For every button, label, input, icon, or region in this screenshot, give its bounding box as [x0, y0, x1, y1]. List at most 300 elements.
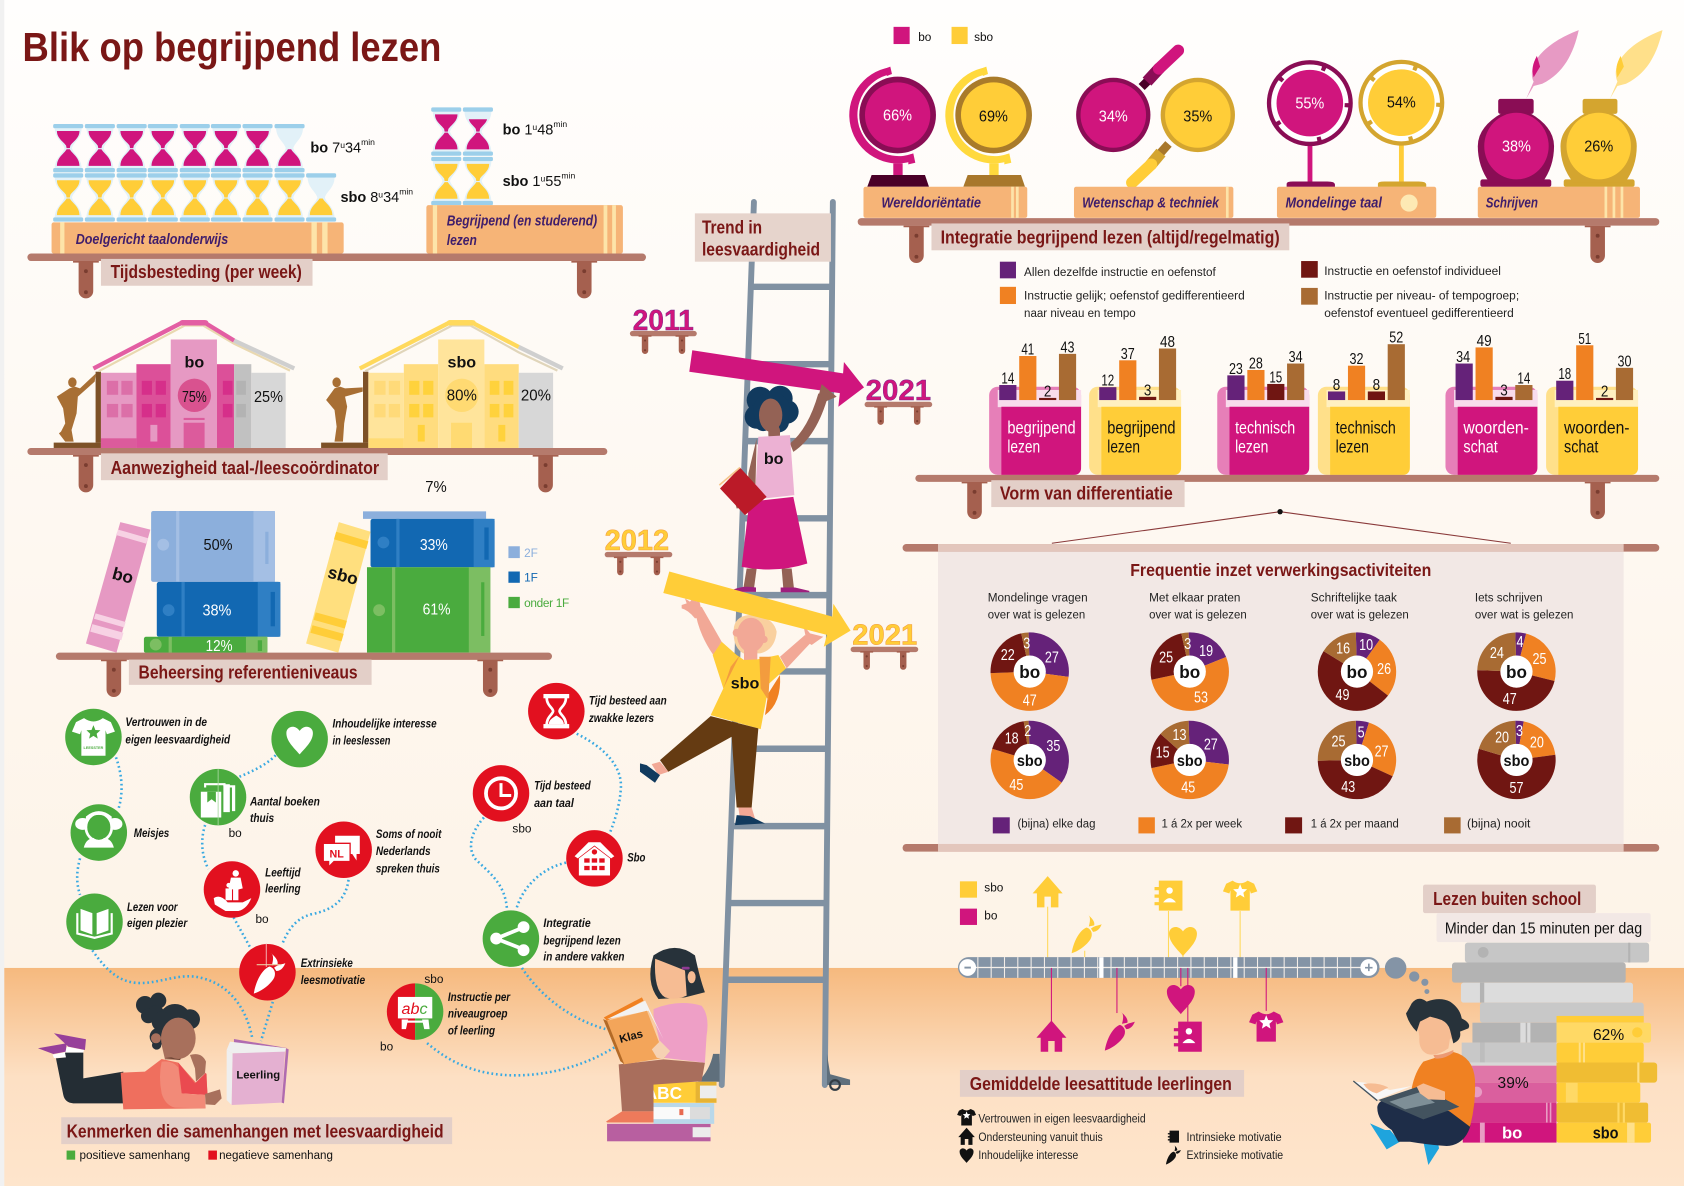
- book: doelgericht taalonderwijs: Doelgericht taalonderwijs: [76, 231, 228, 248]
- column heading: schriftelijke taak: [1311, 591, 1409, 621]
- legend: bo sbo: bo: [918, 30, 932, 44]
- book: light blue 2F bo: [151, 511, 275, 582]
- legend: attitude icons: Inhoudelijke interesse: [978, 1148, 1078, 1162]
- book chart: woordenschat bo: 49: [1477, 332, 1492, 350]
- book: doelgericht taalonderwijs: [52, 222, 344, 254]
- book: wereldorientatie: [863, 187, 1027, 218]
- icon: shirt vertrouwen: LEESSTER: [84, 746, 104, 750]
- label: soms of nooit: Nederlands: [376, 844, 431, 858]
- label: integratie: begrijpend lezen: [543, 933, 621, 947]
- legend: differentiatie: Instructie gelijk; oefenstof gedifferentieerd: [1024, 289, 1245, 303]
- year shelf: 2012: [605, 525, 672, 575]
- panel: beheersing referentieniveaus: [56, 479, 569, 697]
- icon: shirt bo: [1249, 1012, 1283, 1042]
- donut: mondelinge vragen sbo: 18: [1005, 730, 1019, 748]
- book: mondelinge taal: [1277, 187, 1436, 218]
- heading: frequentie: Frequentie inzet verwerkingsactiviteiten: [1130, 560, 1431, 580]
- icon: feather pink: [1526, 30, 1579, 99]
- column heading: mondelinge vragen: over wat is gelezen: [988, 607, 1085, 621]
- book chart: technisch lezen bo: [1217, 348, 1309, 475]
- book chart: begrijpend lezen sbo: 48: [1160, 333, 1175, 351]
- icon: carrot sbo: [1072, 915, 1102, 953]
- value: 80 percent: 80%: [447, 388, 477, 405]
- donut: met elkaar praten sbo: 27: [1204, 735, 1218, 753]
- value: sbo 1u55: min: [561, 170, 575, 180]
- poster sheet: [903, 544, 1659, 852]
- donut: schriftelijke taak sbo: [1329, 723, 1389, 796]
- label: aantal boeken: thuis: [250, 811, 274, 825]
- panel: integratie begrijpend lezen: [849, 27, 1663, 263]
- label: aantal boeken: [249, 795, 320, 825]
- donut: iets schrijven bo: bo: [1506, 662, 1527, 682]
- book chart: begrijpend lezen sbo: lezen: [1107, 436, 1140, 456]
- book: wetenschap en techniek: [1074, 187, 1233, 218]
- donut: mondelinge vragen bo: 3: [1023, 635, 1030, 653]
- donut: mondelinge vragen bo: [1001, 635, 1059, 709]
- label: interesse: in leeslessen: [333, 733, 391, 747]
- icon row: hourglasses sbo doelgericht: [53, 173, 336, 222]
- label: lezen voor eigen plezier: [127, 900, 188, 930]
- illustration: lying girl: [38, 993, 222, 1109]
- legend: attitude icons: Intrinsieke motivatie: [1187, 1130, 1282, 1144]
- legend: attitude icons: Ondersteuning vanuit thuis: [978, 1130, 1103, 1144]
- value: sbo 1u55: u: [540, 174, 545, 184]
- book chart: begrijpend lezen bo: 14: [1001, 370, 1014, 388]
- book chart: woordenschat bo: 14: [1517, 370, 1530, 388]
- book: schrijven: Schrijven: [1486, 194, 1538, 211]
- donut: iets schrijven sbo: 3: [1516, 722, 1523, 740]
- heading: tijdsbesteding: Tijdsbesteding (per week): [111, 261, 302, 282]
- label: tijd taal: Tijd besteed: [534, 779, 591, 793]
- label: integratie: in andere vakken: [543, 949, 625, 963]
- donut: iets schrijven bo: [1489, 633, 1547, 708]
- book: wetenschap en techniek: Wetenschap & techniek: [1082, 194, 1219, 211]
- book chart: woordenschat bo: woorden-: [1462, 417, 1529, 437]
- heading: leesattitude: Gemiddelde leesattitude leerlingen: [970, 1073, 1232, 1094]
- book chart: technisch lezen bo: technisch: [1235, 417, 1295, 437]
- donut: schriftelijke taak sbo: 27: [1375, 743, 1389, 761]
- donut: met elkaar praten sbo: 13: [1173, 726, 1187, 744]
- icon: share integratie: [483, 910, 539, 967]
- icon: mirror sbo: 54%: [1387, 94, 1416, 111]
- label: bo leeftijd: bo: [255, 912, 269, 926]
- book: tilted bo: [86, 522, 150, 653]
- label: sbo: sbo: [447, 353, 476, 371]
- icon: globe bo: [849, 67, 936, 187]
- book chart: technisch lezen bo: 34: [1289, 348, 1303, 366]
- book chart: woordenschat sbo: schat: [1564, 436, 1599, 456]
- shelf: tijdsbesteding: [27, 254, 646, 298]
- donut: mondelinge vragen bo: 27: [1045, 649, 1059, 667]
- book: tilted sbo: [306, 522, 371, 653]
- legend: differentiatie: Instructie en oefenstof individueel: [1324, 264, 1501, 278]
- icon row: hourglasses begrijpend lezen: [431, 107, 493, 205]
- heading: kenmerken: Kenmerken die samenhangen met leesvaardigheid: [67, 1121, 444, 1142]
- illustration: house bo: [54, 320, 294, 448]
- legend: sbo bo: sbo: [984, 881, 1004, 895]
- label: extrinsieke: Extrinsieke: [301, 956, 353, 970]
- year shelf: 2021 bo: 2021: [866, 375, 931, 407]
- panel: kenmerken network: [38, 683, 667, 1162]
- book chart: technisch lezen bo: 23: [1229, 360, 1243, 378]
- value: bo 7u34: bo 7: [310, 141, 340, 157]
- column heading: mondelinge vragen: [988, 591, 1088, 621]
- label: vertrouwen: eigen leesvaardigheid: [125, 732, 231, 746]
- scale slider: [958, 957, 1380, 978]
- donut: met elkaar praten bo: 3: [1184, 635, 1191, 653]
- legend: attitude icons: [957, 1109, 1283, 1165]
- donut: iets schrijven bo: 47: [1503, 690, 1517, 708]
- donut: schriftelijke taak bo: 16: [1336, 640, 1350, 658]
- book chart: woordenschat bo: 3: [1500, 381, 1508, 399]
- shelf: beheersing: [56, 653, 552, 697]
- icon: meisjes: [71, 804, 127, 861]
- value: bo 1u48: min: [553, 119, 567, 129]
- book: begrijpend en studerend lezen: Begrijpend (en studerend): [447, 213, 597, 230]
- donut: met elkaar praten sbo: [1156, 726, 1218, 797]
- legend: referentieniveaus: onder 1F: [524, 596, 569, 610]
- book: tilted sbo: sbo: [326, 562, 360, 589]
- label: tijd taal: aan taal: [534, 796, 574, 810]
- book chart: technisch lezen bo: 28: [1249, 354, 1263, 372]
- icon: mirror bo: 55%: [1295, 96, 1324, 113]
- donut: iets schrijven sbo: sbo: [1504, 752, 1529, 770]
- shelf: aanwezigheid: [27, 448, 607, 492]
- book: dark blue 1F bo: 38%: [202, 603, 232, 620]
- book: green onder 1F sbo: 61%: [423, 601, 451, 618]
- label: instructie: [448, 990, 511, 1038]
- label: instructie: niveaugroep: [448, 1006, 508, 1020]
- donut: met elkaar praten sbo: 45: [1181, 779, 1195, 797]
- donut: schriftelijke taak bo: 49: [1335, 686, 1349, 704]
- donut: iets schrijven sbo: [1489, 722, 1544, 797]
- book: light blue 2F sbo: [363, 511, 486, 519]
- icon: notebook bo: [1174, 1022, 1202, 1052]
- illustration: boy reading: [1353, 999, 1475, 1165]
- book chart: woordenschat sbo: 30: [1618, 352, 1632, 370]
- book chart: woordenschat sbo: woorden-: [1563, 417, 1630, 437]
- book: light blue 2F bo: 50%: [204, 537, 233, 554]
- donut: met elkaar praten bo: 19: [1199, 642, 1213, 660]
- label: leeftijd: Leeftijd: [265, 866, 301, 880]
- donut: mondelinge vragen sbo: sbo: [1017, 752, 1043, 770]
- label: sbo: Sbo: [627, 851, 646, 865]
- icon: magnifier bo: [1076, 50, 1178, 152]
- value: 20 percent: 20%: [521, 388, 551, 405]
- book chart: begrijpend lezen bo: lezen: [1007, 436, 1040, 456]
- icon: globe sbo: [945, 67, 1032, 187]
- donut: schriftelijke taak bo: bo: [1346, 662, 1367, 682]
- label: integratie: [543, 916, 625, 963]
- book chart: begrijpend lezen sbo: 37: [1121, 345, 1135, 363]
- book chart: begrijpend lezen sbo: [1089, 333, 1181, 475]
- value: bo 7u34: u: [340, 140, 345, 150]
- heading: lezen buiten school: Lezen buiten school: [1433, 888, 1581, 909]
- donut: iets schrijven sbo: 57: [1509, 779, 1523, 797]
- label: zwakke lezers: Tijd besteed aan: [589, 694, 667, 708]
- heading: aanwezigheid: Aanwezigheid taal-/leescoördinator: [111, 457, 379, 478]
- value: bo 1u48: u: [532, 122, 537, 132]
- legend: frequentie: (bijna) elke dag: [1017, 817, 1096, 831]
- heading: integratie: Integratie begrijpend lezen (altijd/regelmatig): [941, 226, 1280, 247]
- icon row: hourglasses bo doelgericht: [53, 124, 305, 172]
- illustration: stack of books under Klas girl: [607, 1082, 717, 1141]
- label: sbo stack: sbo: [1593, 1124, 1618, 1143]
- donut: mondelinge vragen bo: 22: [1001, 646, 1015, 664]
- icon: boeken thuis: [190, 769, 246, 825]
- book chart: technisch lezen sbo: [1318, 329, 1410, 475]
- donut: iets schrijven sbo: 20: [1530, 734, 1544, 752]
- icon: NL speech bubbles: NL: [330, 848, 344, 860]
- heading: tijdsbesteding: [101, 259, 313, 286]
- panel: gemiddelde leesattitude: [957, 876, 1380, 1165]
- illustration: book leerling: Leerling: [236, 1070, 280, 1082]
- legend: bo sbo: [894, 27, 994, 44]
- legend: differentiatie: Allen dezelfde instructie en oefenstof: [1024, 265, 1216, 279]
- book: mondelinge taal: Mondelinge taal: [1286, 194, 1383, 211]
- book chart: technisch lezen bo: 15: [1269, 368, 1282, 386]
- legend: frequentie: (bijna) nooit: [1467, 817, 1531, 831]
- book chart: woordenschat sbo: 18: [1558, 365, 1571, 383]
- donut: mondelinge vragen sbo: 45: [1009, 776, 1023, 794]
- donut: mondelinge vragen sbo: 35: [1046, 737, 1060, 755]
- subheading: minder dan 15 minuten: Minder dan 15 minuten per dag: [1445, 920, 1642, 937]
- book chart: technisch lezen sbo: 8: [1333, 376, 1340, 394]
- icon: heart sbo: [1169, 927, 1197, 956]
- book chart: begrijpend lezen bo: 41: [1021, 341, 1034, 359]
- donut: mondelinge vragen sbo: [1002, 722, 1060, 794]
- book: dark blue 1F sbo: [371, 519, 495, 567]
- book chart: begrijpend lezen sbo: 3: [1144, 381, 1151, 399]
- icon: ink bottle bo: 38%: [1502, 138, 1531, 155]
- label: soms of nooit: [376, 827, 442, 875]
- icon: carrot extrinsieke: [239, 943, 296, 1000]
- heading: trend in leesvaardigheid: leesvaardigheid: [702, 239, 820, 260]
- legend: referentieniveaus: 1F: [524, 571, 538, 585]
- book: begrijpend en studerend lezen: [426, 205, 623, 254]
- book chart: begrijpend lezen sbo: begrijpend: [1107, 417, 1175, 437]
- subheading: minder dan 15 minuten: [1437, 913, 1651, 942]
- legend: differentiatie: naar niveau en tempo: [1024, 306, 1136, 320]
- icon: globe bo: 66%: [883, 107, 912, 124]
- label: lezen voor eigen plezier: eigen plezier: [127, 916, 188, 930]
- value: 25 percent: 25%: [254, 389, 283, 406]
- label: vertrouwen: Vertrouwen in de: [125, 715, 207, 729]
- value: bo 1u48: bo 1: [503, 122, 532, 138]
- legend: differentiatie: Instructie per niveau- of tempogroep;: [1324, 289, 1519, 303]
- icon: abc bord instructie: [387, 983, 443, 1040]
- heading: kenmerken: [61, 1117, 452, 1144]
- book: green onder 1F bo: [144, 637, 267, 655]
- label: soms of nooit: Soms of nooit: [376, 827, 442, 841]
- label: extrinsieke: leesmotivatie: [301, 973, 365, 987]
- donut: iets schrijven bo: 25: [1533, 650, 1547, 668]
- panel: vorm van differentiatie: [915, 261, 1659, 519]
- dotted connector lines: [77, 734, 621, 1075]
- icon: feather yellow: [1610, 30, 1663, 99]
- donut: met elkaar praten bo: [1159, 635, 1217, 707]
- year shelf: 2021 bo: [865, 375, 932, 425]
- label: bo boeken: bo: [229, 826, 242, 840]
- panel: aanwezigheid taal-/leescoordinator: [27, 320, 607, 492]
- label: bo on shirt: bo: [764, 450, 784, 468]
- book: dark blue 1F bo: [157, 582, 280, 637]
- icon: heart interesse: [271, 711, 328, 767]
- column heading: iets schrijven: [1475, 591, 1573, 621]
- book chart: woordenschat sbo: 51: [1578, 330, 1591, 348]
- icon: house bo: [1036, 1021, 1066, 1052]
- title: Blik op begrijpend lezen: [23, 24, 441, 70]
- value: 7 percent: 7%: [425, 479, 447, 496]
- icon: mirror sbo: [1361, 62, 1442, 187]
- donut: mondelinge vragen bo: bo: [1019, 662, 1040, 682]
- icon: open book lezen: [66, 893, 123, 950]
- label: instructie: Instructie per: [448, 990, 511, 1004]
- label: interesse: [333, 716, 437, 747]
- donut: iets schrijven bo: 24: [1490, 644, 1504, 662]
- column heading: iets schrijven: Iets schrijven: [1475, 591, 1543, 605]
- donut: mondelinge vragen sbo: 2: [1024, 722, 1031, 740]
- icon: carrot bo: [1105, 1012, 1135, 1051]
- legend: frequentie: [993, 817, 1531, 833]
- legend: attitude icons: Extrinsieke motivatie: [1187, 1148, 1283, 1162]
- book: tilted bo: bo: [110, 563, 136, 588]
- icon: magnifier sbo: 35%: [1183, 108, 1212, 125]
- column heading: met elkaar praten: over wat is gelezen: [1149, 607, 1247, 621]
- label: sbo on shirt: sbo: [731, 675, 759, 693]
- donut: iets schrijven sbo: 20: [1495, 729, 1509, 747]
- legend: samenhang: negatieve samenhang: [219, 1148, 333, 1162]
- label: interesse: Inhoudelijke interesse: [333, 716, 437, 730]
- donut: schriftelijke taak bo: 26: [1377, 660, 1391, 678]
- label: ABC: ABC: [645, 1083, 682, 1103]
- book: green onder 1F sbo: [367, 567, 490, 653]
- value: bo 7u34: 34: [345, 141, 361, 157]
- thought bubbles: [1385, 957, 1429, 994]
- label: zwakke lezers: zwakke lezers: [588, 711, 654, 725]
- donut: met elkaar praten bo: 53: [1194, 689, 1208, 707]
- icon: house sbo: [1033, 876, 1063, 907]
- label: bo stack: bo: [1502, 1124, 1522, 1143]
- icon: ink bottle sbo: [1560, 99, 1637, 187]
- legend: sbo bo: [960, 881, 1004, 925]
- donut: schriftelijke taak sbo: sbo: [1344, 752, 1370, 770]
- donut: schriftelijke taak bo: [1329, 636, 1391, 704]
- legend: samenhang: [67, 1148, 333, 1162]
- value: sbo 8u34: sbo 8: [340, 190, 378, 206]
- illustration: book leerling: [227, 1039, 289, 1105]
- illustration: ladder: [698, 202, 850, 1090]
- value: sbo 8u34: min: [399, 186, 413, 196]
- book chart: woordenschat bo: 34: [1456, 348, 1470, 366]
- book chart: technisch lezen sbo: lezen: [1336, 436, 1369, 456]
- icon: shirt sbo: [1223, 881, 1257, 911]
- panel: tijdsbesteding: [27, 107, 646, 298]
- label: soms of nooit: spreken thuis: [376, 861, 440, 875]
- year shelf: 2021 sbo: [851, 620, 918, 670]
- legend: referentieniveaus: [508, 546, 569, 610]
- illustration: girl with book Klas: [603, 948, 708, 1122]
- heading: lezen buiten school: [1423, 885, 1596, 913]
- illustration: girl sbo on ladder: [640, 597, 823, 825]
- stems: [1048, 907, 1240, 968]
- book chart: technisch lezen bo: lezen: [1235, 436, 1268, 456]
- book: wereldorientatie: Wereldoriëntatie: [881, 194, 981, 211]
- value: sbo 1u55: 55: [545, 174, 561, 190]
- stems bo: [1051, 968, 1266, 1022]
- book chart: begrijpend lezen bo: begrijpend: [1007, 417, 1076, 437]
- legend: differentiatie: oefenstof eventueel gedifferentieerd: [1324, 306, 1514, 320]
- arrow: bo trend: [689, 350, 864, 407]
- donut: schriftelijke taak bo: 10: [1359, 636, 1373, 654]
- icon: NL speech bubbles: [315, 821, 372, 878]
- label: meisjes: Meisjes: [134, 826, 169, 840]
- icon: mirror bo: [1269, 62, 1351, 187]
- column heading: schriftelijke taak: Schriftelijke taak: [1311, 591, 1398, 605]
- year shelf: 2021 sbo: 2021: [852, 620, 917, 652]
- value: sbo 8u34: 34: [383, 190, 399, 206]
- donut: schriftelijke taak sbo: 25: [1332, 733, 1346, 751]
- book: dark blue 1F sbo: 33%: [420, 537, 448, 554]
- shelf: differentiatie: [915, 475, 1659, 519]
- icon: heart bo: [1167, 985, 1195, 1014]
- value: sbo 1u55: sbo 1: [503, 174, 540, 190]
- label: aantal boeken: Aantal boeken: [249, 795, 320, 809]
- book: begrijpend en studerend lezen: lezen: [447, 232, 477, 249]
- label: zwakke lezers: [588, 694, 667, 725]
- legend: frequentie: 1 á 2x per maand: [1311, 817, 1399, 831]
- legend: bo sbo: sbo: [974, 30, 994, 44]
- label: sbo tijd: sbo: [512, 822, 532, 836]
- legend: sbo bo: bo: [984, 908, 998, 922]
- label: bo: bo: [185, 353, 204, 371]
- year shelf: 2011: [630, 305, 697, 354]
- book chart: woordenschat bo: [1445, 332, 1537, 475]
- book chart: begrijpend lezen bo: [989, 338, 1081, 475]
- heading: beheersing: Beheersing referentieniveaus: [139, 661, 358, 682]
- legend: frequentie: 1 á 2x per week: [1162, 817, 1243, 831]
- donut: met elkaar praten sbo: 15: [1156, 744, 1170, 762]
- value: 62 percent: 62%: [1593, 1027, 1624, 1044]
- shelf: integratie: [858, 218, 1659, 263]
- donut: met elkaar praten bo: 25: [1159, 649, 1173, 667]
- illustration: house sbo: [321, 320, 563, 448]
- icon: hourglass zwakke lezers: [528, 683, 585, 739]
- book chart: technisch lezen sbo: 32: [1350, 350, 1364, 368]
- value: 75 percent: 75%: [182, 389, 207, 406]
- donut: met elkaar praten bo: bo: [1179, 662, 1200, 682]
- illustration: woman silhouette: [326, 377, 363, 442]
- icon: magnifier sbo: [1132, 78, 1235, 183]
- label: bo instructie: bo: [380, 1040, 394, 1054]
- book chart: begrijpend lezen bo: 2: [1044, 382, 1051, 400]
- heading: trend in leesvaardigheid: [695, 213, 831, 262]
- donut: iets schrijven bo: 4: [1517, 633, 1524, 651]
- label: Klas: Klas: [618, 1028, 644, 1046]
- donut: schriftelijke taak sbo: 5: [1358, 723, 1365, 741]
- label: sbo instructie: sbo: [424, 972, 444, 986]
- book: schrijven: [1478, 187, 1640, 218]
- icon: clock tijd taal: [473, 765, 529, 822]
- heading: differentiatie: Vorm van differentiatie: [1000, 483, 1173, 504]
- legend: referentieniveaus: 2F: [524, 546, 538, 560]
- donut: met elkaar praten sbo: sbo: [1177, 752, 1203, 770]
- book stack: [1452, 943, 1657, 1143]
- book chart: begrijpend lezen bo: 43: [1061, 338, 1075, 356]
- illustration: girl bo on ladder: [719, 384, 837, 592]
- year shelf: 2012: 2012: [605, 525, 669, 557]
- icon: globe sbo: 69%: [979, 108, 1008, 125]
